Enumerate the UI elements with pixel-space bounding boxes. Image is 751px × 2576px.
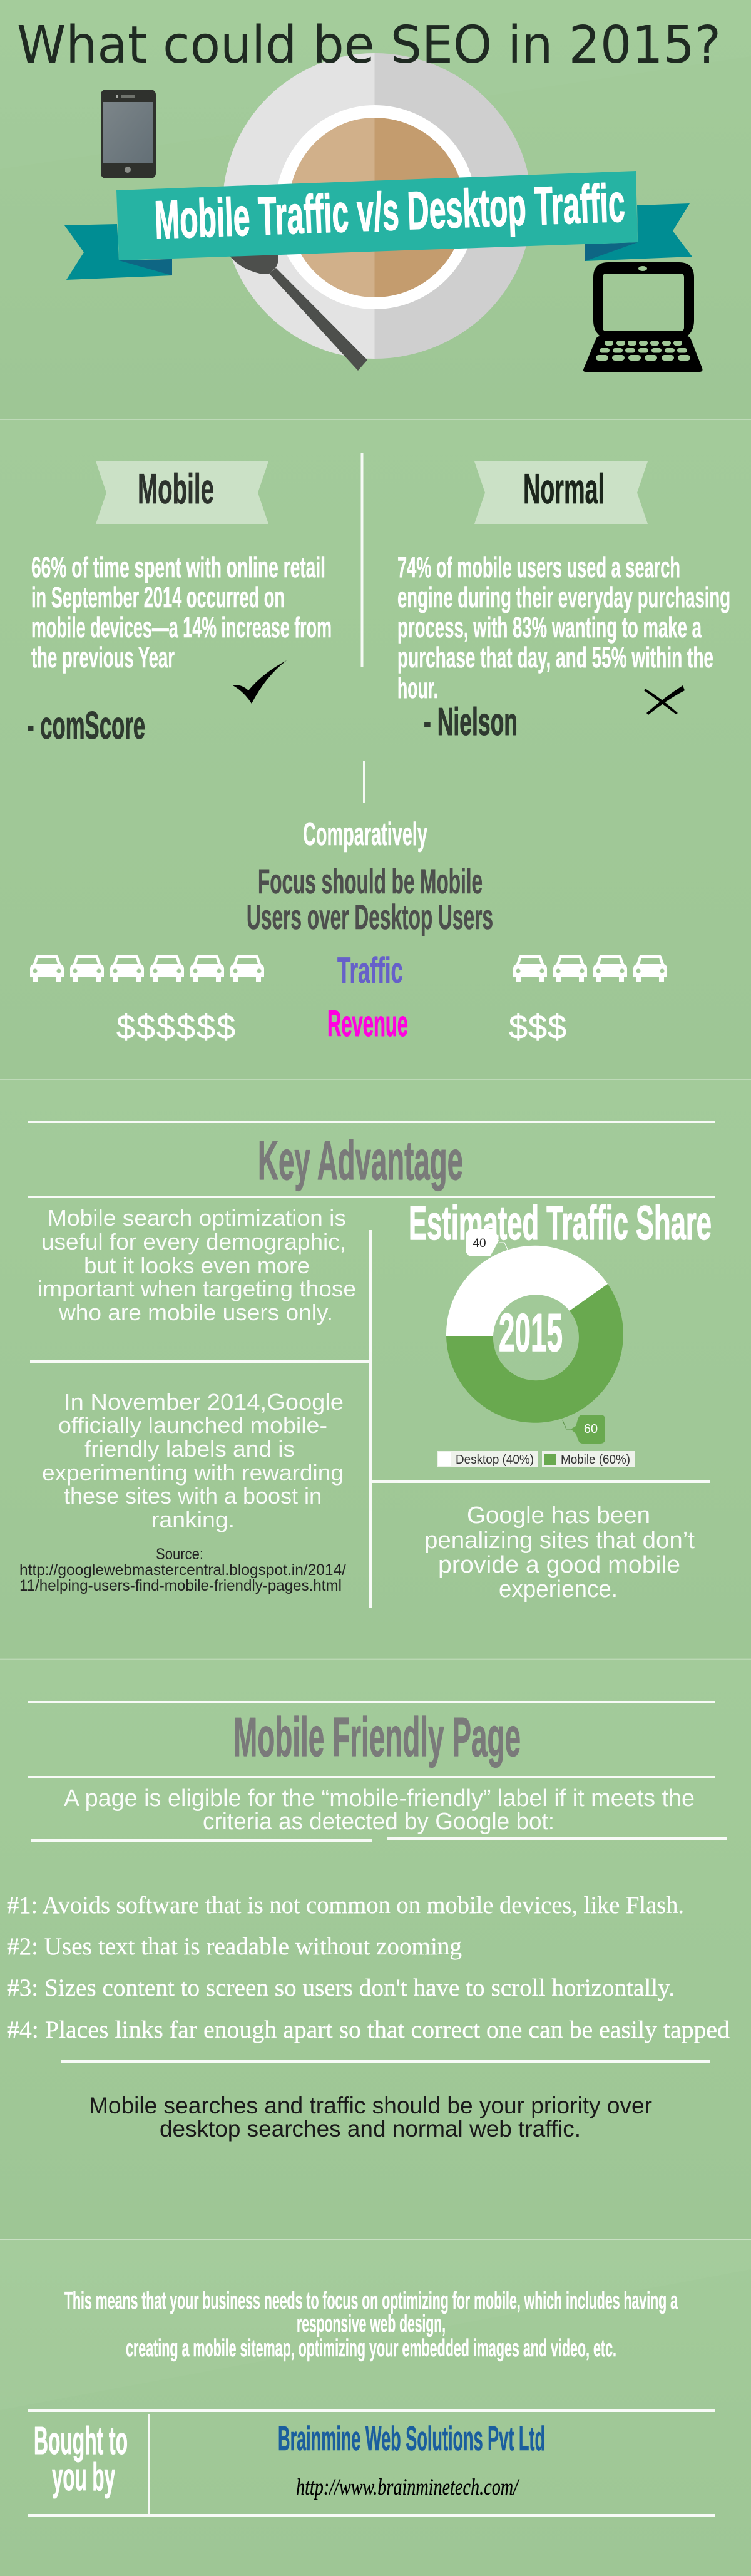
callout: 60: [563, 1415, 605, 1444]
mobile statistic text: 66% of time spent with online retail: [31, 551, 325, 583]
source: comScore: - comScore: [27, 704, 145, 747]
conclusion text: responsive web design,: [297, 2311, 446, 2337]
desktop revenue dollars: $$$: [509, 1008, 566, 1046]
source link: [19, 1546, 346, 1594]
focus statement: Focus should be Mobile: [258, 861, 483, 901]
text: Google penalizing: provide a good mobile: [438, 1552, 680, 1578]
company url: http://www.brainminetech.com/: [296, 2475, 520, 2500]
text: Google penalizing: penalizing sites that don’t: [424, 1527, 695, 1554]
icon: spoon: [230, 254, 367, 371]
normal ribbon heading: Normal: [523, 465, 605, 513]
text: Google penalizing: [424, 1502, 695, 1603]
icon: laptop: [583, 262, 702, 372]
intro text: A page is eligible for the “mobile-friendly” label if it meets the: [64, 1785, 695, 1812]
focus statement: Users over Desktop Users: [247, 897, 493, 936]
criteria list: #4: Places links far enough apart so that correct one can be easily tapped: [7, 2016, 730, 2043]
panel: key advantage: [19, 1121, 715, 1608]
text: November 2014 labels: officially launched mobile-: [58, 1412, 327, 1438]
divider: top: [360, 453, 363, 667]
priority statement: [89, 2093, 652, 2142]
comparatively label: Comparatively: [303, 816, 427, 853]
text: November 2014 labels: In November 2014,Google: [64, 1389, 344, 1415]
criteria list: #3: Sizes content to screen so users don't have to scroll horizontally.: [7, 1974, 675, 2001]
source link: http://googlewebmastercentral.blogspot.in/2014/: [19, 1561, 346, 1579]
text: November 2014 labels: ranking.: [151, 1507, 235, 1532]
credit label: you by: [52, 2456, 115, 2499]
panel: mobile versus normal: [27, 453, 730, 1046]
text: mobile search optimization: [38, 1205, 356, 1325]
text: mobile search optimization: useful for every demographic,: [41, 1229, 346, 1255]
panel: header: [17, 16, 721, 372]
traffic label: Traffic: [337, 950, 403, 991]
text: mobile search optimization: who are mobile users only.: [58, 1300, 333, 1325]
text: mobile search optimization: but it looks even more: [84, 1253, 310, 1278]
callout: 40: [466, 1229, 508, 1256]
callout: 40: 40: [473, 1237, 486, 1250]
credit label: [34, 2419, 128, 2499]
priority statement: Mobile searches and traffic should be your priority over: [89, 2093, 652, 2118]
source: Nielson: - Nielson: [424, 700, 518, 744]
rule lines: [28, 1121, 715, 1608]
normal ribbon heading: [474, 461, 648, 524]
normal statistic text: hour.: [397, 672, 438, 704]
icons: mobile traffic cars: [30, 955, 264, 982]
text: November 2014 labels: these sites with a boost in: [64, 1483, 322, 1509]
source link: Source:: [156, 1546, 203, 1563]
icon: plate and coffee cup: [223, 53, 531, 359]
icon: check mark: [233, 660, 287, 704]
text: November 2014 labels: friendly labels and is: [84, 1436, 295, 1462]
intro text: criteria as detected by Google bot:: [203, 1809, 554, 1835]
chart legend: Desktop (40%): [456, 1453, 534, 1467]
text: November 2014 labels: experimenting with rewarding: [42, 1460, 344, 1486]
chart legend: Mobile (60%): [561, 1453, 630, 1467]
mobile statistic text: mobile devices—a 14% increase from: [31, 611, 332, 644]
donut centre label: 2015: [499, 1303, 563, 1363]
divider: short: [363, 761, 365, 803]
mobile ribbon heading: [96, 461, 268, 524]
text: mobile search optimization: Mobile search optimization is: [48, 1205, 346, 1231]
icon: smartphone: [101, 90, 156, 178]
criteria list: [7, 1892, 730, 2043]
donut chart: [446, 1229, 623, 1444]
rule lines: [28, 2409, 715, 2517]
normal statistic text: [397, 551, 730, 704]
revenue label: Revenue: [327, 1003, 408, 1044]
rule lines: [28, 1701, 727, 2063]
chart legend: [437, 1451, 635, 1467]
focus statement: [247, 861, 493, 936]
credit label: Bought to: [34, 2419, 128, 2463]
text: mobile search optimization: important when targeting those: [38, 1276, 356, 1301]
conclusion text: [64, 2287, 678, 2362]
icon: cross mark: [644, 685, 685, 715]
callout: 60: 60: [584, 1422, 598, 1436]
panel: footer: [28, 2287, 715, 2517]
mobile statistic text: the previous Year: [31, 641, 175, 674]
text: November 2014 labels: [42, 1389, 344, 1532]
text: Google penalizing: Google has been: [467, 1502, 650, 1529]
mobile ribbon heading: Mobile: [138, 465, 214, 513]
intro text: [64, 1785, 695, 1835]
icons: desktop traffic cars: [513, 955, 667, 982]
panel: mobile friendly page: [7, 1701, 730, 2142]
priority statement: desktop searches and normal web traffic.: [160, 2116, 581, 2142]
source link: 11/helping-users-find-mobile-friendly-pages.html: [19, 1577, 342, 1594]
criteria list: #2: Uses text that is readable without zooming: [7, 1933, 462, 1960]
heading: Key Advantage: [258, 1129, 463, 1191]
title: What could be SEO in 2015?: [17, 16, 721, 75]
mobile statistic text: in September 2014 occurred on: [31, 581, 285, 613]
criteria list: #1: Avoids software that is not common on mobile devices, like Flash.: [7, 1892, 684, 1919]
mobile revenue dollars: $$$$$$: [116, 1008, 235, 1046]
ribbon banner: [64, 171, 692, 280]
mobile statistic text: [31, 551, 332, 674]
text: Google penalizing: experience.: [499, 1576, 618, 1603]
